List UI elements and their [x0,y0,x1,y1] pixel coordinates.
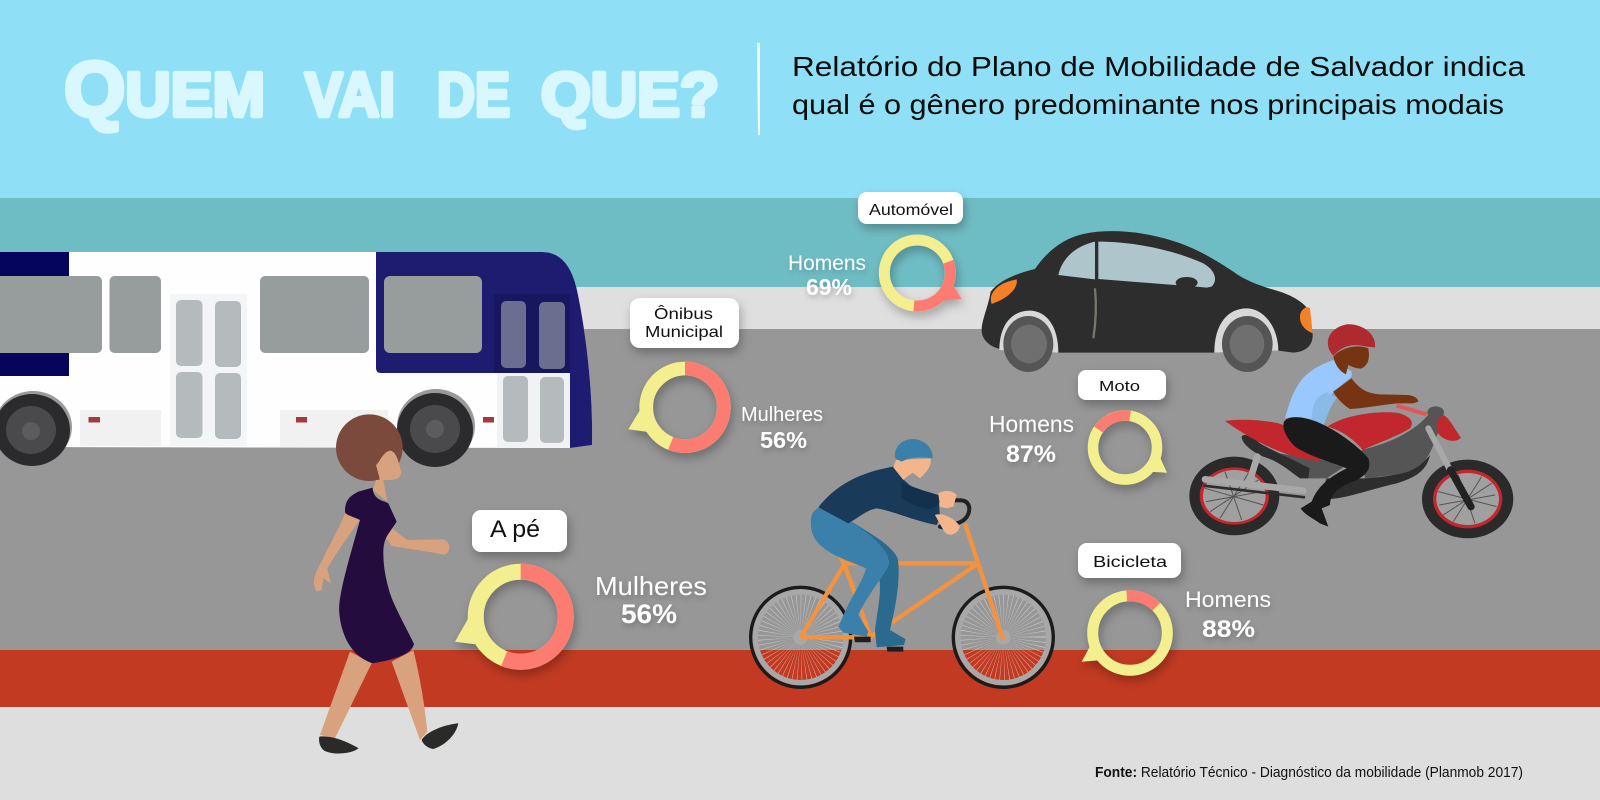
cyclist and bicycle [751,439,1053,687]
value: mulheres 56%: Mulheres [595,571,707,601]
sky header background [0,0,1600,198]
value: homens 69%: 69% [806,274,852,300]
donut: bicicleta 88% [1082,593,1170,673]
value: homens 87%: Homens [989,411,1074,437]
label: ônibus municipal [630,298,739,348]
back arm [314,513,360,592]
subtitle [792,51,1525,120]
label: a pé [472,510,567,552]
red bike lane [0,650,1600,707]
value: homens 88%: 88% [1202,616,1255,643]
far leg [852,522,906,647]
bicycle rear wheel [751,587,851,687]
road [0,329,1600,650]
value: mulheres 56%: Mulheres [741,404,823,426]
door line [1093,288,1096,338]
handlebar [1397,406,1427,414]
rider head [1333,346,1369,374]
panel: moto [989,370,1169,492]
rear wheel [0,391,72,466]
skirts and markers [80,410,494,447]
value: mulheres 56%: 56% [760,427,807,453]
fork lower [1451,470,1471,507]
teal sea band [0,198,1600,287]
label: ônibus municipal: Ônibus [654,304,713,323]
bicycle front wheel [953,587,1053,687]
label: bicicleta: Bicicleta [1093,554,1167,571]
helmet [1328,324,1375,356]
cyclist head [893,458,931,480]
title: QUE? [541,61,719,130]
bus body [0,252,592,448]
value: homens 87% [989,411,1074,468]
motorcycle and rider [1189,324,1513,538]
front car wheel [1214,308,1278,372]
face and neck [373,451,401,502]
torso and near arm [818,467,940,525]
label: automóvel [858,192,963,224]
fender [1437,415,1461,441]
source note: Fonte: Relatório Técnico - Diagnóstico da mobilidade (Planmob 2017) [1095,765,1523,781]
label: bicicleta [1078,543,1181,578]
label: a pé: A pé [490,516,540,543]
value: homens 88%: Homens [1185,587,1271,612]
side panel [1280,453,1347,478]
upper sidewalk [0,287,1600,329]
value: mulheres 56% [595,571,707,629]
title [64,45,719,133]
rear car wheel [999,311,1058,372]
bicycle frame [801,523,1003,640]
windows [0,276,482,353]
front moto wheel [1422,460,1513,538]
exhaust [1205,457,1303,491]
engine [1362,408,1443,478]
panel: ônibus municipal [628,298,823,453]
rider arm [1333,378,1418,409]
hands [935,491,960,535]
front navy section [376,252,592,448]
donut: ônibus 56% [628,368,724,446]
value: homens 87%: 87% [1006,441,1056,468]
value: mulheres 56%: 56% [621,599,677,629]
mirror [1176,277,1198,288]
subtitle: qual é o gênero predominante nos principais modais [792,89,1504,120]
value: homens 69% [788,252,866,300]
headlight [1427,406,1444,418]
value: homens 88% [1185,587,1271,643]
front arm [385,527,449,555]
pedals [854,637,903,652]
label: ônibus municipal: Municipal [645,324,723,341]
bus [0,252,592,467]
rider shirt [1285,360,1352,425]
fork [1428,428,1450,470]
under seat frame [1242,435,1310,478]
far arm [902,482,940,509]
front door [494,294,570,448]
panel: bicicleta [1078,543,1271,673]
shoes [319,723,458,754]
legs [320,650,427,740]
lower sidewalk [0,707,1600,800]
belly frame [1320,455,1430,499]
title: QUEM [64,45,265,133]
rider pants [1283,417,1369,527]
cyclist helmet [895,439,933,462]
donut: moto 87% [1081,403,1169,492]
label: moto: Moto [1099,378,1140,395]
front wheel [397,389,475,467]
title: VAI [305,61,395,130]
fuel tank [1328,412,1412,450]
label: automóvel: Automóvel [869,202,953,219]
car body [982,231,1313,353]
car windows [1058,242,1215,288]
donut: a pé 56% [455,572,566,662]
panel: a pé [455,510,707,662]
shirt shade [1312,392,1337,425]
divider [757,43,760,135]
pedestrian woman [314,414,458,754]
hair [336,414,403,481]
handlebar [940,500,969,528]
exhaust shadow [1203,486,1305,497]
dress [339,488,414,663]
middle door [170,294,247,446]
seat tail [1225,420,1323,461]
panel: automóvel [788,192,963,315]
label: moto [1078,370,1166,400]
car [982,231,1313,372]
rear navy stripe [0,252,69,376]
near leg [811,508,889,637]
lights [991,279,1313,333]
donut: automóvel 69% [875,231,962,315]
rear moto wheel [1189,457,1279,535]
value: homens 69%: Homens [788,252,866,275]
title: DE [437,61,510,130]
value: mulheres 56% [741,404,823,453]
subtitle: Relatório do Plano de Mobilidade de Salvador indica [792,51,1525,82]
